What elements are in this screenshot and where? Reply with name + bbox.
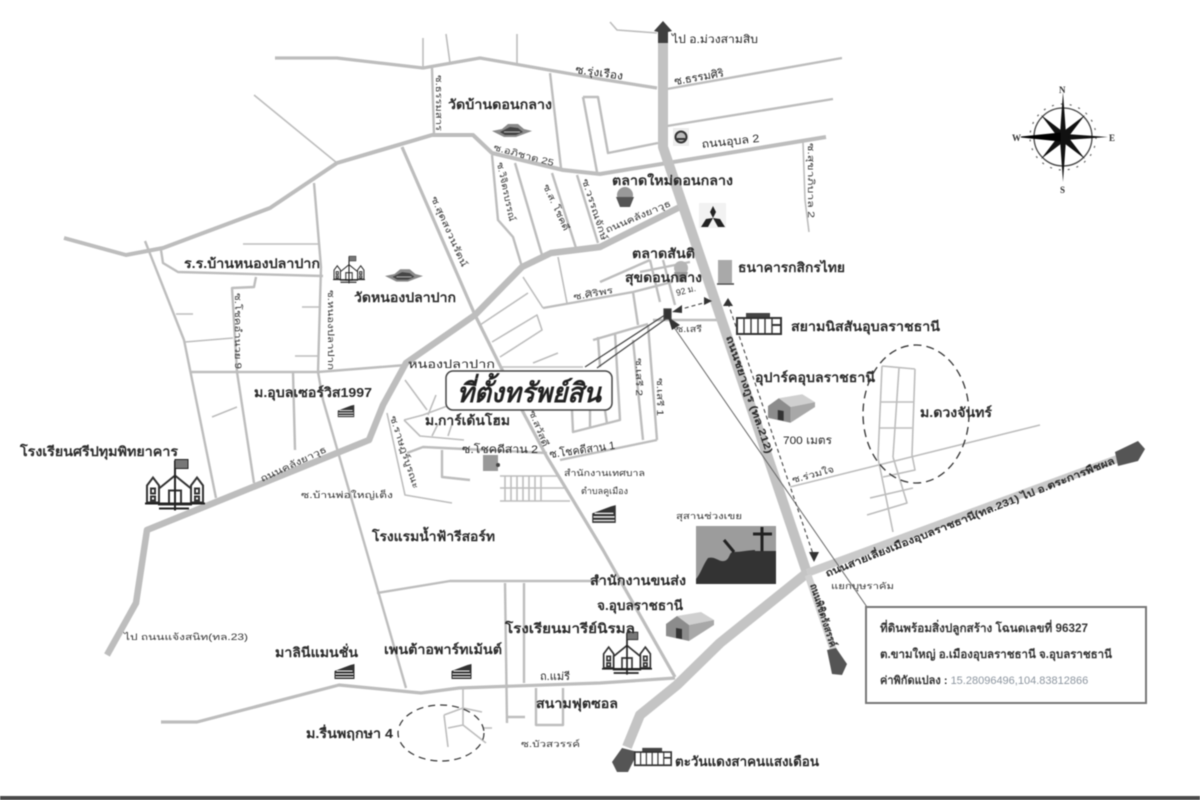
road and place labels: ซ.เสรี: [676, 324, 702, 334]
leader line to info box: [668, 317, 867, 607]
road and place labels: ซ.โชคอำนวย 9: [233, 293, 243, 369]
road and place labels: ซ.เสรี 2: [634, 358, 644, 396]
icon: Mitsubishi logo: [699, 203, 726, 228]
road and place labels: ซ.ส. โชคดี: [541, 183, 571, 232]
road and place labels: สำนักงานขนส่ง: [590, 573, 686, 588]
road east with arrow: [807, 441, 1145, 573]
icon: gas station: [673, 128, 689, 146]
info box: ค่าพิกัดแปลง : 15.28096496,104.83812866: [880, 674, 1088, 687]
icon: Mary Nirmol school: [602, 632, 652, 675]
road and place labels: ม.ดวงจันทร์: [920, 405, 992, 420]
icon: Nissan showroom: [737, 313, 781, 334]
road and place labels: แยกบุษราคัม: [831, 581, 894, 592]
road south with arrow: [808, 575, 847, 675]
road and place labels: ซ.หนองปลาปาก: [326, 290, 336, 370]
title label: ที่ตั้งทรัพย์สิน: [446, 371, 612, 410]
icon: Penta apartment: [452, 664, 472, 679]
road and place labels: หนองปลาปาก: [408, 359, 495, 371]
road and place labels: สยามนิสสันอุบลราชธานี: [791, 319, 940, 335]
icon: grey dot: [483, 455, 500, 471]
road and place labels: ซ.ธรรมสาร: [434, 75, 444, 131]
road and place labels: ซ.โชคดีสาน 2: [462, 442, 538, 456]
highway 212 with north arrow: [654, 21, 807, 573]
icon: warehouse U-park: [768, 394, 815, 423]
icon: Kasikorn bank building: [717, 260, 734, 284]
dashed boundary: ม.รื่นพฤกษา 4: [398, 705, 484, 761]
icon: temple Don Klang: [492, 124, 532, 137]
road and place labels: ร.ร.บ้านหนองปลาปาก: [184, 256, 320, 271]
road and place labels: จ.อุบลราชธานี: [597, 598, 683, 614]
road and place labels: ถนนคลังยาวุธ: [259, 444, 329, 485]
picture: cemetery: [696, 526, 776, 584]
info box: ต.ขามใหญ่ อ.เมืองอุบลราชธานี จ.อุบลราชธานี: [880, 647, 1112, 662]
road and place labels: ธนาคารกสิกรไทย: [738, 259, 845, 275]
road and place labels: ซ.ราษฎร์บูรณะ: [387, 414, 422, 490]
icon: compass rose: E: [1109, 133, 1115, 143]
dashed boundary: ม.ดวงจันทร์: [863, 345, 969, 483]
road and place labels: ซ.อภิชาต 25: [492, 142, 555, 168]
road and place labels: ซ.วรรณจักษ์: [580, 177, 610, 242]
icon: U-service: [338, 405, 354, 417]
road and place labels: ซ.บัวสวรรค์: [521, 738, 580, 749]
road and place labels: ม.อุบลเซอร์วิส1997: [254, 385, 372, 401]
road and place labels: ไป ถนนแจ้งสนิท(ทล.23): [123, 632, 248, 642]
road and place labels: ถนนอุบล 2: [701, 133, 760, 151]
road and place labels: ตลาดสันติ: [632, 246, 695, 261]
road and place labels: มาลินีแมนชั่น: [275, 643, 358, 660]
road and place labels: ซ.รุ่งเรือง: [575, 63, 624, 83]
info box: [866, 607, 1146, 703]
icon: municipal office: [592, 505, 616, 523]
road and place labels: ซ.วิจิตรบรรณ์: [495, 161, 518, 222]
road and place labels: ซ.ร่วมใจ: [791, 464, 835, 485]
info box: ที่ดินพร้อมสิ่งปลูกสร้าง โฉนดเลขที่ 96327: [880, 619, 1088, 636]
road and place labels: ซ.เสรี 1: [655, 378, 665, 416]
road south-west with arrow: [612, 573, 807, 772]
road and place labels: วัดหนองปลาปาก: [354, 290, 456, 305]
road and place labels: ซ.ศิริพร: [573, 285, 614, 302]
bottom border: [0, 796, 1200, 800]
road and place labels: ถนนคลังยาวุธ: [604, 198, 673, 236]
road and place labels: ไป อ.ม่วงสามสิบ: [671, 33, 758, 46]
road and place labels: สุสานช่วงเขย: [676, 511, 742, 522]
icon: compass rose: W: [1012, 133, 1021, 143]
pointer from label to property: [585, 309, 671, 368]
icon: temple Nong Pla Pak: [385, 269, 423, 282]
road and place labels: โรงเรียนศรีปทุมพิทยาคาร: [19, 443, 178, 460]
road and place labels: ตำบลคูเมือง: [581, 486, 628, 497]
road and place labels: ซ.สวัสดี: [527, 409, 551, 448]
icon: Sri Pathum school: [145, 460, 205, 510]
road and place labels: โรงแรมน้ำฟ้ารีสอร์ท: [371, 526, 495, 544]
road and place labels: ม.รื่นพฤกษา 4: [306, 724, 394, 741]
road and place labels: 700 เมตร: [783, 435, 832, 447]
road and place labels: วัดบ้านดอนกลาง: [448, 97, 552, 112]
road and place labels: อุปาร์คอุบลราชธานี: [755, 370, 875, 386]
road and place labels: ซ.สุขาภิบาล 2: [805, 143, 816, 218]
road and place labels: ซ.บ้านพ่อใหญ่เต็ง: [301, 488, 393, 500]
road and place labels: ตะวันแดงสาคนแสงเดือน: [675, 754, 819, 769]
road and place labels: ถ.แม่รี: [540, 670, 570, 683]
title label: ที่ตั้งทรัพย์สิน: ที่ตั้งทรัพย์สิน: [457, 372, 602, 408]
road and place labels: ถนนชยางกูร (ทล.212): [722, 334, 774, 456]
main roads: [64, 58, 826, 722]
road and place labels: ซ.โชคดีสาน 1: [548, 438, 616, 461]
icon: compass rose: S: [1060, 185, 1065, 195]
icon: new market: [616, 187, 634, 207]
icon: school Ban Nong Pla Pak: [333, 256, 365, 283]
icon: transport office: [666, 612, 714, 641]
icon: compass rose: N: [1059, 85, 1066, 95]
road and place labels: โรงเรียนมารีย์นิรมล: [504, 620, 635, 636]
dashed distance arrows: [672, 297, 819, 562]
road and place labels: ถนนสายเลี่ยงเมืองอุบลราชธานี(ทล.231) ไป อ.ตระการพืชผล: [823, 453, 1117, 580]
icon: santi market: [674, 261, 688, 282]
road and place labels: ม.การ์เด้นโฮม: [425, 412, 510, 428]
road and place labels: 92 ม.: [675, 283, 697, 298]
road and place labels: ถนนพิชิตรังสรรค์: [807, 582, 839, 649]
road and place labels: สุขดอนกลาง: [625, 270, 702, 286]
road and place labels: เพนต้าอพาร์ทเม้นต์: [384, 642, 502, 657]
icon: compass rose: [1012, 85, 1115, 195]
road and place labels: สนามฟุตซอล: [536, 696, 618, 712]
road and place labels: ซ.ธรรมศิริ: [673, 67, 725, 88]
icon: Malini mansion: [334, 664, 354, 679]
road and place labels: ตลาดใหม่ดอนกลาง: [612, 172, 733, 188]
road and place labels: สำนักงานเทศบาล: [564, 468, 645, 478]
road and place labels: ซ.สุดสงวนรัตน์: [428, 194, 470, 269]
icon: sunset showroom: [635, 748, 671, 765]
minor roads: [145, 22, 1040, 747]
